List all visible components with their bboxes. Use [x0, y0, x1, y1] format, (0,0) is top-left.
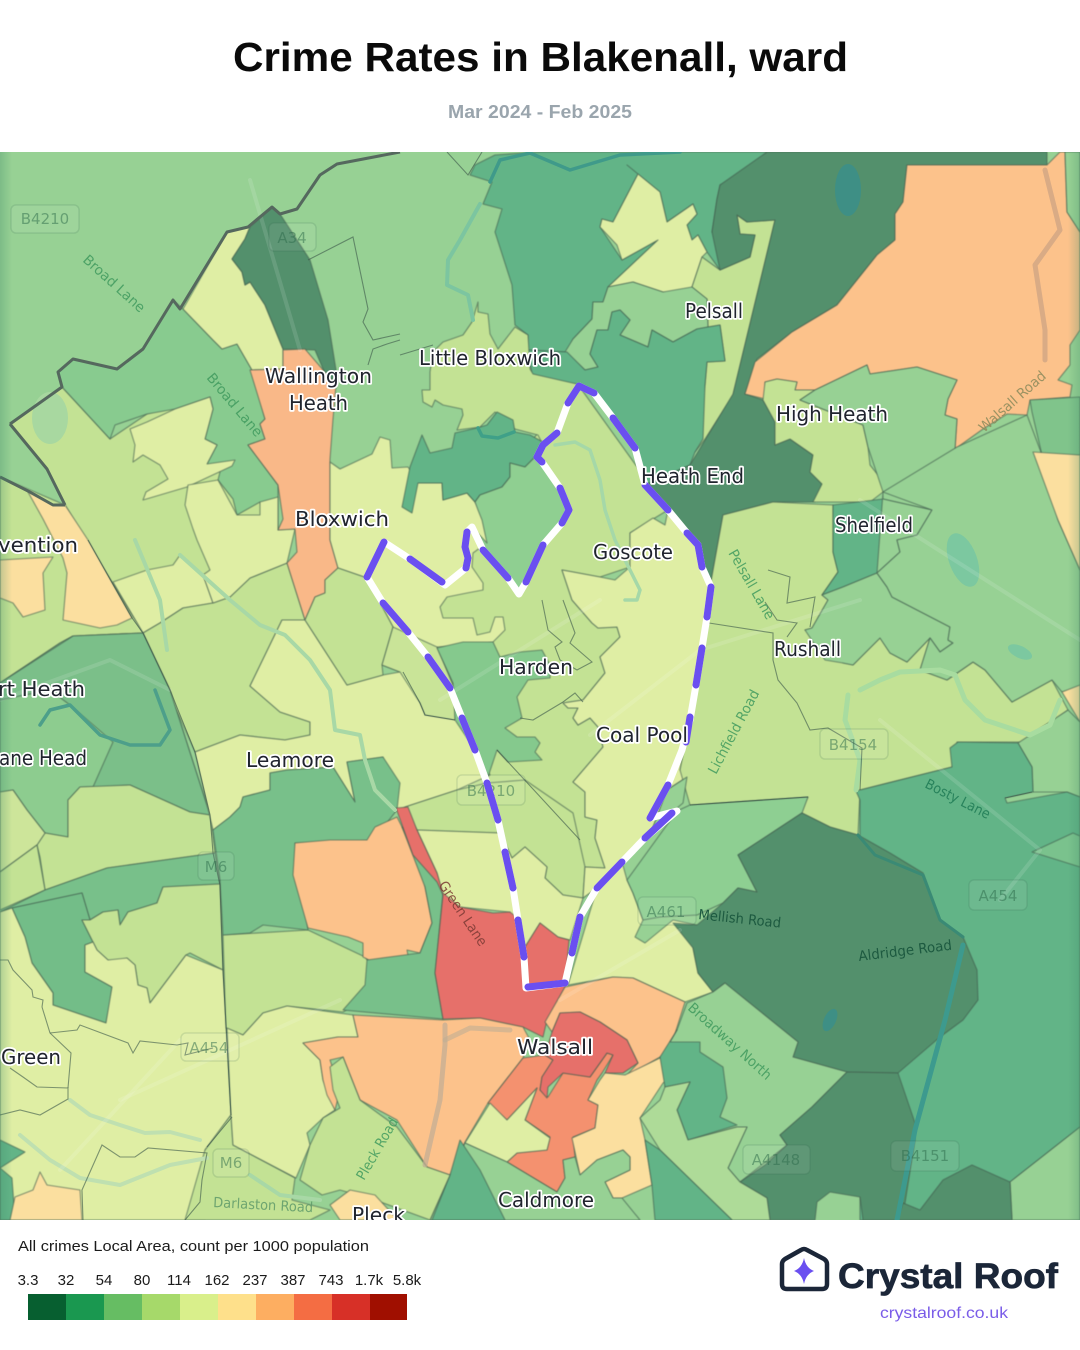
- road name labels: Broad Lane: [203, 370, 265, 440]
- road name labels: Aldridge Road: [858, 938, 953, 965]
- road name labels: Darlaston Road: [213, 1195, 313, 1216]
- place labels: Heath End: [641, 464, 744, 488]
- road number badges: M6: [220, 1154, 242, 1172]
- road number badges: A454: [190, 1039, 228, 1057]
- legend tick labels: 3.3: [18, 1272, 38, 1289]
- place labels: Caldmore: [498, 1188, 594, 1212]
- legend tick labels: 54: [96, 1272, 112, 1289]
- road number badges: B4210: [21, 210, 69, 228]
- ward and area boundary lines: [0, 152, 1032, 1220]
- legend tick labels: 162: [204, 1272, 230, 1289]
- map base: [0, 152, 1080, 1220]
- place labels: Heath: [289, 391, 348, 415]
- place labels: Pleck: [352, 1203, 405, 1227]
- road name labels: Walsall Road: [976, 368, 1050, 436]
- water, motorways and road traces: [0, 152, 1080, 1220]
- road name labels: [79, 252, 1050, 1216]
- road name labels: Broad Lane: [79, 252, 148, 316]
- legend colour scale: [28, 1294, 407, 1320]
- road number badges: [11, 205, 1027, 1177]
- legend tick labels: 1.7k: [355, 1272, 384, 1289]
- road number badges: B4151: [901, 1147, 949, 1165]
- subtitle: date range: Mar 2024 - Feb 2025: [448, 102, 632, 122]
- legend tick labels: 387: [280, 1272, 306, 1289]
- map panel: [0, 152, 1080, 1227]
- place labels: Coal Pool: [596, 723, 688, 747]
- legend tick labels: 32: [58, 1272, 74, 1289]
- legend tick labels: 80: [134, 1272, 150, 1289]
- legend tick labels: 743: [318, 1272, 344, 1289]
- place labels: Leamore: [246, 748, 334, 772]
- side vignette: [0, 152, 1080, 1220]
- icon: house with star: [782, 1249, 827, 1289]
- place labels: [0, 299, 913, 1227]
- place labels: ane Head: [0, 746, 87, 770]
- legend tick labels: [18, 1272, 422, 1289]
- road name labels: Bosty Lane: [922, 776, 993, 823]
- road number badges: B4154: [829, 736, 877, 754]
- place labels: rt Heath: [0, 677, 85, 701]
- road number badges: B4210: [467, 782, 515, 800]
- place labels: Wallington: [265, 364, 372, 388]
- place labels: Harden: [499, 655, 573, 679]
- legend: [18, 1238, 422, 1320]
- road number badges: A454: [979, 887, 1017, 905]
- road number badges: A461: [647, 903, 685, 921]
- place labels: High Heath: [776, 402, 888, 426]
- road name labels: Pleck Road: [354, 1115, 402, 1183]
- white outline: [367, 386, 711, 988]
- road name labels: Lichfield Road: [705, 687, 763, 777]
- road number badges: A4148: [752, 1151, 800, 1169]
- legend tick labels: 114: [167, 1272, 191, 1289]
- road number badges: A34: [277, 229, 307, 247]
- place labels: Goscote: [593, 540, 673, 564]
- logo: Crystal Roof: [782, 1249, 1058, 1322]
- place labels: Walsall: [517, 1035, 593, 1059]
- purple dashes: [367, 386, 711, 987]
- place labels: Green: [1, 1045, 61, 1069]
- road number badges: M6: [205, 858, 227, 876]
- place labels: Little Bloxwich: [419, 346, 561, 370]
- place labels: Pelsall: [685, 299, 743, 323]
- road name labels: Mellish Road: [698, 907, 782, 932]
- place labels: vention: [0, 533, 78, 557]
- road name labels: Broadway North: [684, 1000, 775, 1084]
- place labels: Bloxwich: [295, 507, 389, 531]
- legend title: All crimes Local Area, count per 1000 population: [18, 1238, 369, 1255]
- place labels: Shelfield: [835, 513, 913, 537]
- website: crystalroof.co.uk: [880, 1305, 1009, 1322]
- place labels: Rushall: [774, 637, 841, 661]
- choropleth areas: [0, 152, 1080, 1220]
- wordmark: Crystal Roof: [838, 1257, 1058, 1296]
- Blakenall ward outline: [367, 386, 711, 988]
- road name labels: Green Lane: [435, 878, 490, 949]
- legend tick labels: 237: [242, 1272, 268, 1289]
- road name labels: Pelsall Lane: [725, 547, 777, 623]
- legend tick labels: 5.8k: [393, 1272, 422, 1289]
- title: Crime Rates in Blakenall, ward: [233, 34, 848, 80]
